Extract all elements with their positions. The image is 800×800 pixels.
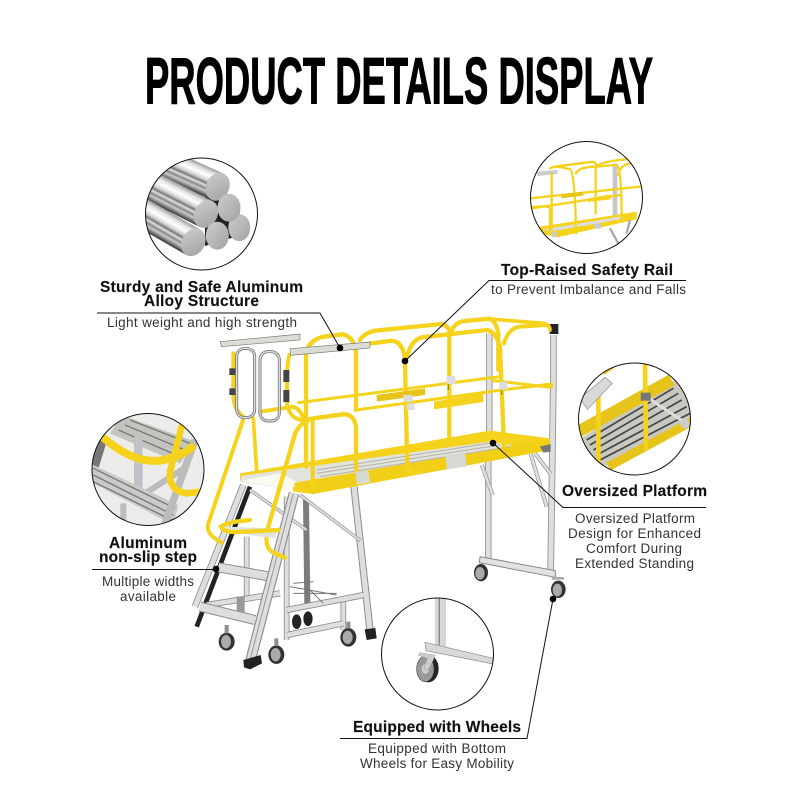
text: wheels description line 1: Equipped with Bottom [368, 741, 506, 756]
rear wheels [474, 564, 566, 598]
heading: aluminum structure: Sturdy and Safe Aluminum [100, 279, 303, 296]
heading: non-slip step line 1: Aluminum [109, 535, 187, 552]
icon: wheel circle [382, 597, 494, 710]
text: available: available [120, 589, 176, 604]
yellow safety rails [208, 319, 552, 558]
heading: safety rail: Top-Raised Safety Rail [501, 262, 673, 279]
ladder frame [195, 485, 377, 669]
front wheels [219, 611, 356, 664]
text: platform description line 3: Comfort During [586, 541, 682, 556]
rear right column and legs [479, 324, 558, 577]
heading: wheels: Equipped with Wheels [353, 719, 521, 736]
platform deck [240, 431, 551, 494]
callout line: safety rail [402, 280, 686, 364]
callout line: non-slip step [92, 566, 219, 572]
icon: non-slip step circle [90, 410, 207, 530]
text: light weight: Light weight and high strength [107, 315, 297, 330]
text: multiple widths: Multiple widths [102, 574, 194, 589]
heading line 2: aluminum structure: Alloy Structure [144, 293, 259, 310]
callout line: aluminum structure [97, 313, 343, 351]
icon: safety rail circle [530, 142, 642, 254]
heading: oversized platform: Oversized Platform [562, 483, 707, 500]
heading: non-slip step line 2: non-slip step [99, 549, 197, 566]
icon: oversized platform circle [578, 363, 692, 475]
text: platform description line 1: Oversized Platform [575, 511, 695, 526]
text: wheels description line 2: Wheels for Easy Mobility [360, 756, 514, 771]
callout line: oversized platform [490, 440, 706, 508]
text: platform description line 4: Extended Standing [575, 556, 694, 571]
product illustration: platform ladder [195, 319, 566, 669]
icon: aluminum rods circle [145, 158, 258, 270]
callout line: wheels [340, 596, 556, 738]
text: prevent falls: to Prevent Imbalance and Falls [491, 282, 686, 297]
swing gate and top caps [220, 334, 507, 421]
text: platform description line 2: Design for Enhanced [568, 526, 701, 541]
